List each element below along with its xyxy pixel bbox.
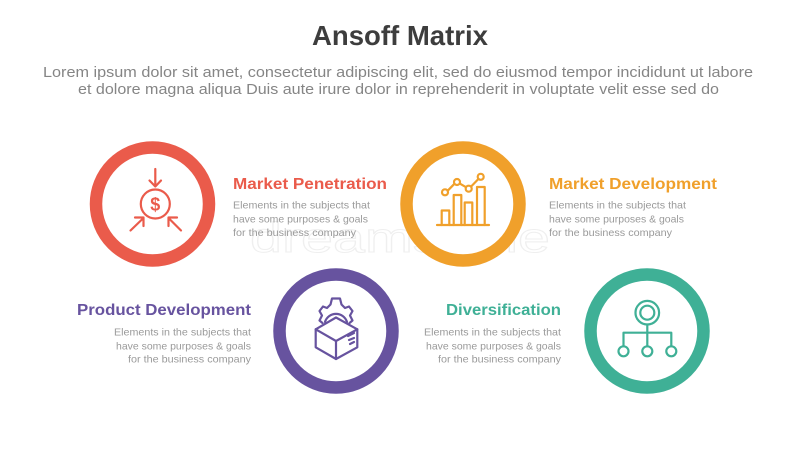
ring: diversification xyxy=(590,274,704,388)
body: diversification: for the business company xyxy=(438,355,562,366)
ring: product development xyxy=(280,274,392,388)
body: diversification: have some purposes & goals xyxy=(426,341,561,352)
body: market penetration: Elements in the subjects that xyxy=(233,200,370,212)
panel: product development xyxy=(77,274,392,388)
ring: market development xyxy=(406,148,520,260)
body: market development: for the business company xyxy=(549,228,673,239)
body: market penetration: have some purposes & goals xyxy=(233,214,368,226)
panel: diversification xyxy=(424,274,704,388)
subtitle text: et dolore magna aliqua Duis aute irure dolor in reprehenderit in voluptate velit esse sed do xyxy=(78,81,719,98)
icon: dollar with converging arrows: $ xyxy=(150,194,160,214)
body: market development xyxy=(549,200,686,239)
body: product development: Elements in the subjects that xyxy=(114,328,251,338)
body: market penetration: for the business company xyxy=(233,228,357,239)
icon: dollar with converging arrows xyxy=(130,169,181,230)
icon: gear and box xyxy=(316,298,357,359)
panel: market penetration xyxy=(96,148,387,260)
panel: market development xyxy=(406,148,717,260)
body: diversification: Elements in the subjects that xyxy=(424,328,561,338)
icon: hierarchy xyxy=(618,301,676,356)
subtitle text xyxy=(43,64,753,98)
body: product development: have some purposes & goals xyxy=(116,341,251,352)
title: Ansoff Matrix xyxy=(312,20,488,51)
subtitle text: Lorem ipsum dolor sit amet, consectetur adipiscing elit, sed do eiusmod tempor incididunt ut labore xyxy=(43,64,753,81)
text: dreamstime xyxy=(250,214,550,261)
heading: market penetration: Market Penetration xyxy=(233,176,387,193)
heading: diversification: Diversification xyxy=(446,302,561,319)
heading: market development: Market Development xyxy=(549,176,717,193)
ring: market penetration xyxy=(96,148,209,260)
body: product development: for the business company xyxy=(128,355,252,366)
body: market development: have some purposes & goals xyxy=(549,214,684,226)
body: market development: Elements in the subjects that xyxy=(549,200,686,212)
heading: product development: Product Development xyxy=(77,302,251,319)
icon: bar chart with trend line xyxy=(437,174,489,225)
body: diversification xyxy=(424,328,562,366)
body: product development xyxy=(114,328,252,366)
body: market penetration xyxy=(233,200,370,239)
